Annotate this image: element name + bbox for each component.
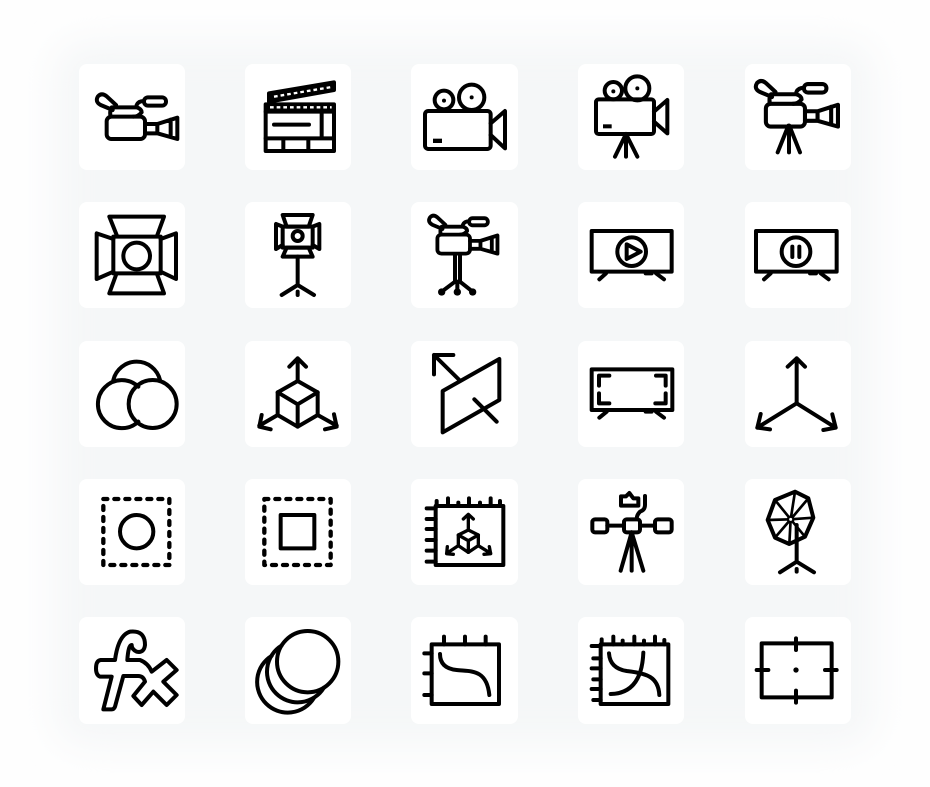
card: clapperboard (245, 64, 351, 170)
icon: camera rig on tripod (592, 493, 672, 571)
icon: camcorder on tripod (756, 81, 838, 152)
card: umbrella light (745, 479, 851, 585)
card: camera rig on tripod (578, 479, 684, 585)
icon: crop frame with centre (757, 638, 837, 703)
card: three circles (79, 341, 185, 447)
card: graph with 3D cube (411, 479, 518, 585)
icon: TV pause (756, 231, 837, 279)
icon: camcorder on wheeled stand (429, 216, 497, 296)
icon: three circles (98, 362, 177, 428)
icon: fx symbol (96, 631, 177, 709)
card: fx symbol (79, 617, 185, 724)
icon: 3D cube axes (259, 358, 337, 429)
icon: studio light on stand (276, 215, 319, 295)
icon: film camera (425, 85, 505, 149)
icon: three axes (757, 358, 836, 430)
icon: overlapping layers circles (257, 631, 338, 713)
icon: camcorder (97, 94, 177, 139)
card: barn-door light (79, 202, 185, 308)
icon: plane with normal arrow (434, 355, 499, 432)
card: square selection (245, 479, 351, 585)
card: TV pause (745, 202, 851, 308)
card: studio light on stand (245, 202, 351, 308)
icon: film camera on tripod (596, 76, 667, 157)
icon: graph with 3D cube (427, 498, 503, 565)
card: graph two curves (578, 617, 684, 724)
icon: TV frame corners (592, 369, 672, 418)
card: plane with normal arrow (411, 341, 518, 447)
card: three axes (745, 341, 851, 447)
card: camcorder (79, 64, 185, 170)
icon: square selection (264, 499, 331, 565)
card: film camera (411, 64, 518, 170)
icon: graph single curve (424, 637, 499, 704)
soft grey background glow (55, 42, 875, 746)
icon: barn-door light (97, 217, 176, 293)
card: TV frame corners (578, 341, 684, 447)
icon: umbrella light (768, 492, 814, 572)
icon: TV play (592, 231, 672, 279)
card: overlapping layers circles (245, 617, 351, 724)
card: crop frame with centre (745, 617, 851, 724)
icon: circle selection (103, 499, 169, 565)
card: 3D cube axes (245, 341, 351, 447)
card: camcorder on tripod (745, 64, 851, 170)
card: circle selection (79, 479, 185, 585)
card: film camera on tripod (578, 64, 684, 170)
icon: graph two curves (592, 637, 668, 704)
card: graph single curve (411, 617, 518, 724)
card: camcorder on wheeled stand (411, 202, 518, 308)
card: TV play (578, 202, 684, 308)
icon: clapperboard (266, 82, 334, 151)
